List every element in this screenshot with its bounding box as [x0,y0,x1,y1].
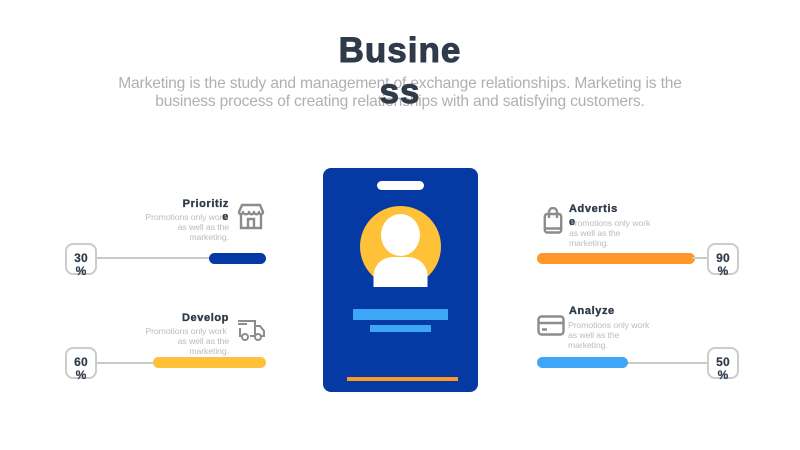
title [339,31,461,111]
value: 60% [74,355,88,382]
text: Develop description: Promotions only work [145,326,227,336]
text: Advertise description: Promotions only work [569,218,650,228]
connector line [625,362,710,364]
progress bar: 90% [537,253,695,264]
panel: Advertise [537,203,739,278]
heading: Prioritize: e [222,211,229,223]
heading: Analyze: Analyze [569,305,615,317]
connector line [97,257,212,259]
name bar [353,309,448,320]
value: 60%: 60 [74,355,88,369]
subtitle text: business process of creating relationships with and satisfying customers. [155,93,645,110]
value box: 30% [65,243,97,275]
text: Advertise description [569,218,650,248]
heading: Advertise [569,203,618,228]
text: Prioritize description: Promotions only work [145,212,227,222]
value: 60%: % [76,368,86,382]
panel: Develop [65,312,266,382]
icon: store [238,204,264,230]
text: Develop description: as well as the [178,336,229,346]
text: Analyze description: Promotions only work [568,320,649,330]
value: 90% [716,251,730,278]
heading: Develop: Develop [182,312,229,324]
icon: truck [238,320,265,341]
value box: 60% [65,347,97,379]
progress bar: 30% [209,253,266,264]
heading: Advertise: Advertis [569,203,618,215]
card slot [377,181,424,190]
value: 50% [716,355,730,382]
value: 90%: % [718,264,728,278]
text: Prioritize description: as well as the [178,222,229,232]
value box: 90% [707,243,739,275]
connector line [97,362,157,364]
value: 50%: % [718,368,728,382]
value: 30%: 30 [74,251,88,265]
text: Prioritize description: marketing. [189,232,229,242]
panel: Analyze [537,305,739,382]
value: 90%: 90 [716,251,730,265]
subtitle text: Marketing is the study and management of exchange relationships. Marketing is the [118,75,682,92]
value: 30% [74,251,88,278]
footer stripe [347,377,458,380]
progress bar: 60% [153,357,266,368]
title: Busine [339,31,461,70]
text: Analyze description [568,320,650,350]
value: 30%: % [76,264,86,278]
text: Analyze description: as well as the [568,330,619,340]
text: Develop description: marketing. [189,346,229,356]
heading: Prioritize [183,198,229,223]
heading: Advertise: e [569,216,576,228]
title: ss [380,72,420,111]
connector line [692,257,710,259]
panel: ID card [323,168,478,392]
icon: shopping bag [544,207,562,234]
text: Prioritize description [145,212,229,242]
value box: 50% [707,347,739,379]
subtitle text [118,75,682,110]
text: Advertise description: as well as the [569,228,620,238]
value: 50%: 50 [716,355,730,369]
icon: credit card [537,315,565,336]
text: Advertise description: marketing. [569,238,609,248]
heading: Prioritize: Prioritiz [183,198,229,210]
title bar [370,325,431,332]
panel: Prioritize [65,198,266,278]
progress bar: 50% [537,357,628,368]
text: Analyze description: marketing. [568,340,608,350]
text: Develop description [145,326,229,356]
icon: person avatar [360,206,441,287]
